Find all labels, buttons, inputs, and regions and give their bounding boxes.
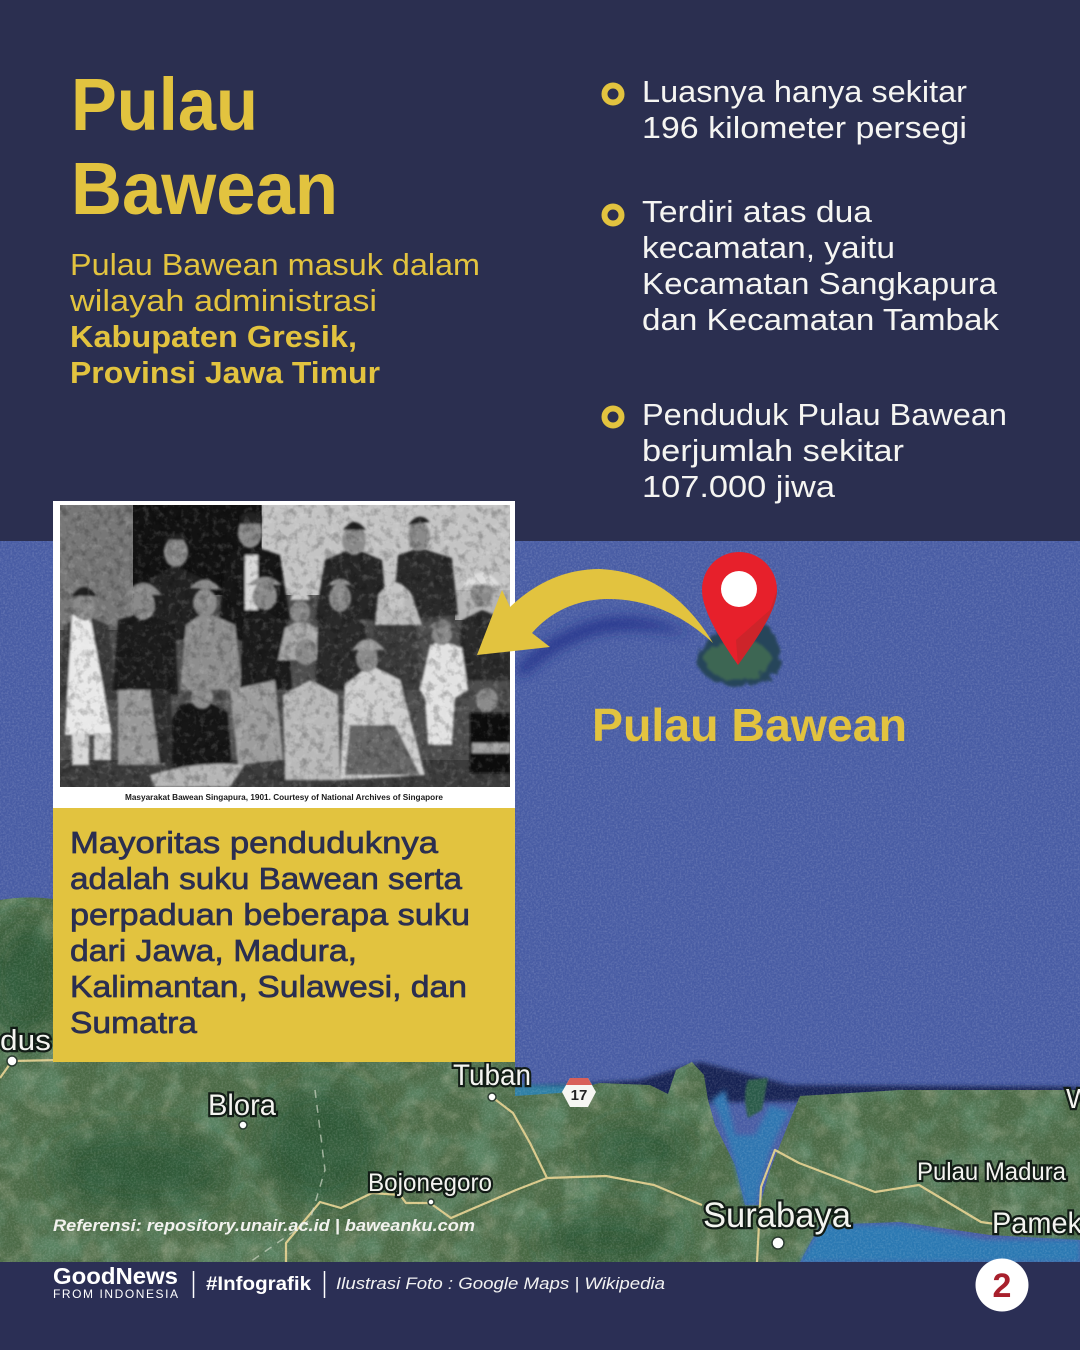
subtitle text block: Pulau Bawean masuk dalam (70, 247, 480, 282)
arrow shadow (515, 618, 690, 675)
footer logo (53, 1263, 178, 1301)
map: madura strait (712, 1090, 790, 1205)
fact 3: berjumlah sekitar (642, 433, 904, 468)
subtitle text block: wilayah administrasi (69, 283, 377, 318)
subtitle text block: Provinsi Jawa Timur (70, 355, 380, 390)
panel text: Sumatra (70, 1005, 198, 1040)
seated children (230, 680, 283, 765)
photo caption: Masyarakat Bawean Singapura, 1901. Courtesy of National Archives of Singapore (125, 793, 443, 802)
map: small island in strait (745, 1078, 768, 1118)
header background (0, 0, 1080, 541)
map: java land mass (0, 898, 1080, 1262)
historic group photo (60, 505, 510, 787)
map: darker land patches (0, 920, 690, 1265)
panel text (70, 825, 470, 1040)
panel text: Mayoritas penduduknya (70, 825, 439, 860)
subtitle text block (69, 247, 480, 390)
map: dashed border (250, 1090, 325, 1262)
map: grain (0, 541, 1080, 1262)
map pin (702, 552, 777, 665)
panel text: dari Jawa, Madura, (70, 933, 357, 968)
map: highway badge 17 (562, 1078, 596, 1107)
batik skirts (118, 690, 165, 765)
subtitle text block: Kabupaten Gresik, (70, 319, 357, 354)
faces and headwear (72, 512, 500, 712)
fact 3: 107.000 jiwa (642, 469, 836, 504)
map labels: dus (0, 1025, 51, 1057)
satellite map background (0, 541, 1080, 1265)
fact 2: dan Kecamatan Tambak (642, 302, 1000, 337)
fact 2: Terdiri atas dua (642, 194, 873, 229)
page number badge (976, 1258, 1028, 1312)
child in light dress (420, 640, 468, 745)
right boy and chest (470, 713, 510, 773)
white robe child (65, 615, 112, 735)
title (71, 63, 338, 230)
map: land mottling (0, 890, 1080, 1262)
map labels: Blora (208, 1089, 276, 1122)
fact 1: 196 kilometer persegi (642, 110, 967, 145)
map labels: Bojonegoro (368, 1169, 492, 1197)
title: Bawean (71, 147, 338, 230)
island label: Pulau Bawean (592, 699, 907, 751)
map: city dots (7, 1056, 784, 1249)
page number badge: 2 (993, 1267, 1011, 1305)
arrow from island to photo (477, 569, 713, 655)
second row bodies (60, 615, 118, 700)
footer bar (0, 1262, 1080, 1350)
footer credit: Ilustrasi Foto : Google Maps | Wikipedia (336, 1274, 665, 1293)
panel text: adalah suku Bawean serta (70, 861, 463, 896)
fact 3: Penduduk Pulau Bawean (642, 397, 1007, 432)
panel text: perpaduan beberapa suku (70, 897, 470, 932)
photo mottling (60, 505, 510, 787)
map labels (0, 1025, 1080, 1240)
map labels: Tuban (453, 1059, 531, 1092)
back row men (148, 567, 202, 642)
fact 2: kecamatan, yaitu (642, 230, 895, 265)
fact 2: Kecamatan Sangkapura (642, 266, 998, 301)
yellow text panel (53, 808, 515, 1062)
map: teal shallows (515, 1082, 598, 1096)
fact 1 (604, 74, 967, 145)
photo card frame (53, 501, 515, 808)
footer logo: FROM INDONESIA (53, 1287, 178, 1301)
panel text: Kalimantan, Sulawesi, dan (70, 969, 467, 1004)
map labels: Pulau Madura (917, 1158, 1066, 1186)
map: highway badge 17: 17 (571, 1087, 587, 1104)
fact 1: Luasnya hanya sekitar (642, 74, 967, 109)
fact 2 (604, 194, 1000, 337)
title: Pulau (71, 63, 258, 146)
references: Referensi: repository.unair.ac.id | baweanku.com (53, 1216, 475, 1235)
map: roads (0, 1060, 995, 1262)
map: coastal shadow (515, 1062, 1080, 1105)
footer logo: GoodNews (53, 1263, 178, 1289)
map labels: Surabaya (703, 1196, 852, 1235)
footer separators (194, 1271, 324, 1298)
fact 3 (604, 397, 1007, 504)
front boy and chest (172, 700, 232, 770)
island of Bawean (695, 625, 781, 685)
footer tag: #Infografik (206, 1274, 311, 1295)
map: southern waters (800, 1225, 1080, 1262)
